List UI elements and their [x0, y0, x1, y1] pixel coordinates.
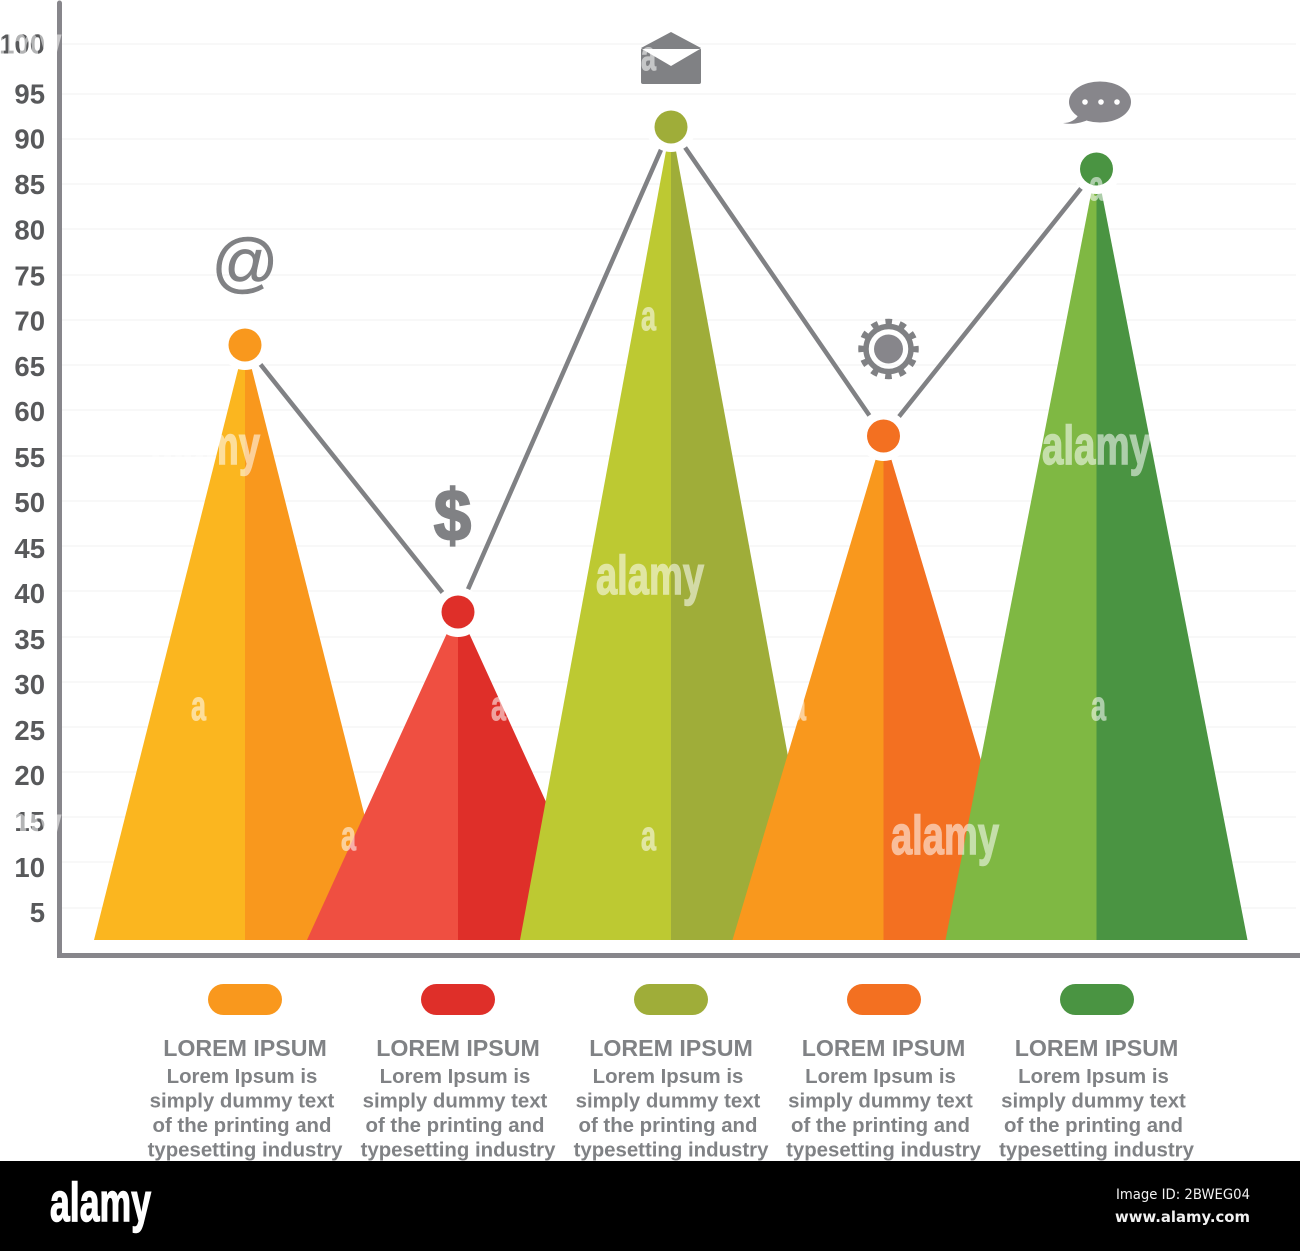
y-axis labels — [0, 29, 45, 928]
legend pill 4 — [847, 984, 921, 1015]
legend text 5 — [999, 1035, 1195, 1162]
legend text 4: of the printing and — [791, 1115, 970, 1137]
legend pill 3 — [634, 984, 708, 1015]
legend text 3: of the printing and — [579, 1115, 757, 1137]
legend text 1: of the printing and — [153, 1115, 331, 1137]
legend text 1: LOREM IPSUM — [163, 1035, 327, 1061]
icon: envelope — [641, 32, 701, 84]
legend text 5: Lorem Ipsum is — [1018, 1066, 1169, 1088]
legend text 3: Lorem Ipsum is — [593, 1066, 743, 1088]
legend text 2: typesetting industry — [361, 1140, 556, 1162]
legend text 1: Lorem Ipsum is — [167, 1066, 317, 1088]
node 2 — [433, 587, 483, 637]
y-axis labels: 70 — [14, 306, 45, 337]
y-axis labels: 20 — [14, 760, 45, 791]
legend text 3 — [574, 1035, 769, 1162]
peak 4: deep orange — [732, 433, 1034, 940]
watermarks: alamy — [891, 804, 999, 866]
watermarks: a — [1089, 162, 1104, 209]
legend text 4: typesetting industry — [786, 1140, 982, 1162]
y-axis labels: 15 — [14, 806, 45, 837]
y-axis labels: 80 — [14, 215, 45, 246]
legend pill 1 — [208, 984, 282, 1015]
watermarks: alamy — [596, 544, 704, 606]
icon: speech bubble — [1063, 82, 1131, 124]
icon: gear — [862, 322, 916, 376]
y-axis labels: 30 — [14, 669, 45, 700]
legend text 1 — [148, 1035, 343, 1162]
legend pill 5 — [1060, 984, 1134, 1015]
y-axis labels: 35 — [14, 624, 45, 655]
y-axis labels: 40 — [14, 578, 45, 609]
watermarks: a — [641, 32, 656, 79]
y-axis labels: 85 — [14, 169, 45, 200]
peak 3: olive — [520, 124, 822, 940]
footer url: www.alamy.com — [1115, 1208, 1250, 1226]
legend text 5: simply dummy text — [1001, 1090, 1186, 1112]
peak 5: green — [946, 166, 1248, 940]
node 3 — [646, 102, 696, 152]
watermarks: a — [791, 682, 806, 729]
watermarks: alamy — [1042, 414, 1151, 476]
watermarks: alamy — [152, 414, 260, 476]
connecting trend line — [245, 127, 1096, 612]
y-axis labels: 5 — [30, 897, 45, 928]
y-axis labels: 75 — [14, 261, 45, 292]
footer logo: alamy — [50, 1171, 151, 1233]
legend text 3: simply dummy text — [576, 1090, 761, 1112]
watermarks — [0, 14, 1151, 866]
watermarks: a — [491, 682, 506, 729]
peak 2: red — [307, 609, 609, 940]
legend text 2: Lorem Ipsum is — [380, 1066, 530, 1088]
legend text 5: typesetting industry — [999, 1140, 1195, 1162]
y-axis labels: 95 — [14, 79, 45, 110]
peak 1: orange — [94, 342, 396, 940]
legend text 1: simply dummy text — [150, 1090, 335, 1112]
node 1 — [220, 320, 270, 370]
watermarks: a — [1091, 682, 1106, 729]
watermarks: a — [191, 682, 206, 729]
y-axis labels: 55 — [14, 442, 45, 473]
footer bar — [0, 1161, 1300, 1251]
legend text 5: LOREM IPSUM — [1015, 1035, 1178, 1061]
watermarks: a — [641, 292, 656, 339]
y-axis labels: 100 — [0, 29, 45, 60]
y-axis labels: 45 — [14, 533, 45, 564]
y-axis labels: 10 — [14, 852, 45, 883]
legend text 5: of the printing and — [1004, 1115, 1183, 1137]
legend text 4: simply dummy text — [788, 1090, 973, 1112]
y-axis labels: 90 — [14, 124, 45, 155]
watermarks: a — [641, 812, 656, 859]
legend text 3: typesetting industry — [574, 1140, 769, 1162]
y-axis labels: 50 — [14, 487, 45, 518]
legend text 2: of the printing and — [366, 1115, 544, 1137]
watermarks: a — [341, 812, 356, 859]
legend text 4 — [786, 1035, 982, 1162]
chart axes — [60, 3, 1300, 956]
node 4 — [858, 411, 908, 461]
icon: at sign: @ — [212, 225, 278, 299]
y-axis labels: 65 — [14, 351, 45, 382]
legend text 4: LOREM IPSUM — [802, 1035, 965, 1061]
legend text 3: LOREM IPSUM — [589, 1035, 753, 1061]
legend text 4: Lorem Ipsum is — [805, 1066, 956, 1088]
y-axis labels: 25 — [14, 715, 45, 746]
y-axis labels: 60 — [14, 396, 45, 427]
legend text 1: typesetting industry — [148, 1140, 343, 1162]
legend pill 2 — [421, 984, 495, 1015]
node 5 — [1072, 144, 1122, 194]
footer image id: Image ID: 2BWEG04 — [1116, 1187, 1250, 1203]
icon: dollar sign: $ — [434, 475, 471, 556]
legend text 2: simply dummy text — [363, 1090, 548, 1112]
legend text 2 — [361, 1035, 556, 1162]
legend text 2: LOREM IPSUM — [376, 1035, 540, 1061]
